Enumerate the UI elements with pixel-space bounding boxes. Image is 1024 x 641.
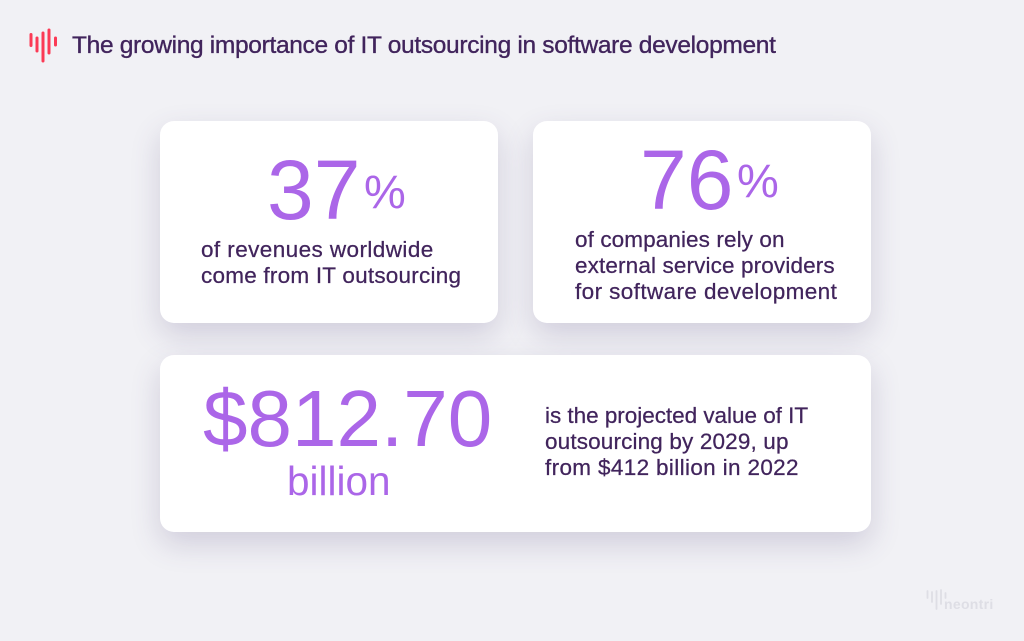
stat description: of revenues worldwide <box>201 237 434 262</box>
panel: market value stat <box>160 355 871 532</box>
stat description <box>545 403 808 480</box>
stat number: 37: 37 <box>267 143 360 237</box>
stat unit: percent: % <box>364 165 406 218</box>
stat description: is the projected value of IT <box>545 403 808 428</box>
icon: footer waveform <box>926 589 946 610</box>
wordmark: neontri <box>944 596 994 612</box>
title: The growing importance of IT outsourcing in software development <box>72 32 776 59</box>
stat number: 76: 76 <box>640 133 733 227</box>
panel: 37% stat <box>160 121 498 323</box>
footer logo: neontri <box>926 589 994 612</box>
stat number: $812.70: $812.70 <box>203 374 492 463</box>
stat description: come from IT outsourcing <box>201 263 461 288</box>
panel: 76% stat <box>533 121 871 323</box>
stat description <box>575 227 837 304</box>
stat description: of companies rely on <box>575 227 785 252</box>
stat description: external service providers <box>575 253 835 278</box>
icon: logo waveform <box>30 28 57 62</box>
stat unit: billion: billion <box>287 458 391 504</box>
stat description: for software development <box>575 279 837 304</box>
stat unit: percent: % <box>737 154 779 207</box>
stat description: outsourcing by 2029, up <box>545 429 789 454</box>
stat description: from $412 billion in 2022 <box>545 455 799 480</box>
stat description <box>201 237 461 288</box>
